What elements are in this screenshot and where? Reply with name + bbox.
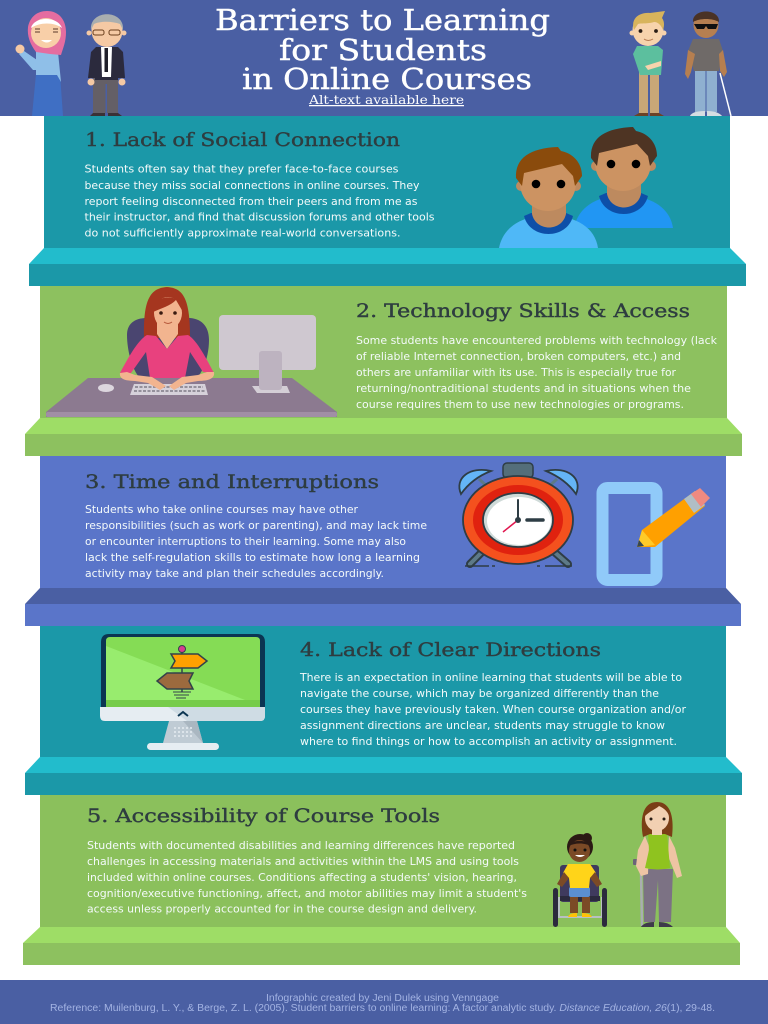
shelf 2	[25, 418, 742, 456]
shelf 5	[23, 927, 740, 965]
student at back	[574, 127, 673, 228]
body text 5: cognition/executive functioning, affect, and motor abilities may limit a student's	[87, 887, 527, 900]
body text 2	[356, 334, 718, 411]
body text 4	[299, 671, 687, 748]
body text 4: navigate the course, which may be organized differently than the	[300, 687, 659, 700]
footer credits: Infographic created by Jeni Dulek using Venngage	[266, 993, 499, 1004]
title: Barriers to Learning	[215, 4, 550, 37]
student at front	[499, 147, 598, 248]
body text 5	[87, 839, 527, 916]
body text 1: their instructor, and find that discussion forums and other tools	[84, 210, 435, 224]
body text 5: challenges in accessing materials and activities within the LMS and using tools	[87, 855, 519, 868]
body text 4: courses they have previously taken. When course organization and/or	[300, 703, 687, 716]
body text 5: included within online courses. Conditions affecting a students' vision, hearing,	[87, 871, 517, 884]
title	[215, 4, 550, 96]
body text 3: activity may take and plan their schedules accordingly.	[85, 567, 384, 580]
icon: rounded notepad outline and pencil	[602, 488, 710, 580]
panel 1: Lack of Social Connection	[29, 116, 746, 286]
heading 5: 5. Accessibility of Course Tools	[87, 805, 440, 827]
body text 1: do not sufficiently approximate real-world conversations.	[84, 226, 400, 240]
body text 2: of reliable Internet connection, broken computers, etc.) and	[356, 350, 681, 363]
icon: student with cane	[685, 12, 731, 116]
body text 1: Students often say that they prefer face-to-face courses	[84, 162, 399, 176]
icon: woman at computer desk	[46, 287, 337, 417]
icon: monitor with signpost	[100, 634, 265, 750]
body text 1: because they miss social connections in online courses. They	[84, 179, 420, 192]
body text 3	[85, 503, 427, 580]
body text 2: returning/nontraditional students and in situations when the	[356, 382, 691, 395]
shelf 3	[25, 588, 741, 626]
heading 1: 1. Lack of Social Connection	[85, 129, 400, 151]
body text 5: access unless properly accounted for in the course design and delivery.	[87, 902, 477, 916]
title: in Online Courses	[242, 63, 532, 96]
panel 3: Time and Interruptions	[25, 456, 741, 626]
body text 4: where to find things or how to accomplish an activity or assignment.	[300, 735, 677, 748]
alt-text link: Alt-text available here	[308, 92, 464, 107]
shelf 1	[29, 248, 746, 286]
footer credits: Reference: Muilenburg, L. Y., & Berge, Z. L. (2005). Student barriers to online learning: A factor analytic study. Distance Education, 26 (1), 29-48.	[50, 1003, 715, 1014]
panel 2: Technology Skills and Access	[25, 286, 742, 456]
heading 4: 4. Lack of Clear Directions	[300, 639, 601, 661]
body text 2: others are unfamiliar with its use. This is especially true for	[356, 366, 677, 379]
icon: alarm clock	[459, 463, 578, 566]
body text 3: Students who take online courses may have other	[85, 503, 359, 516]
body text 4: assignment directions are unclear, students may struggle to know	[300, 719, 665, 732]
body text 1: report feeling disconnected from their peers and from me as	[84, 195, 418, 208]
heading 3: 3. Time and Interruptions	[85, 471, 379, 493]
footer credits	[50, 993, 715, 1014]
icon: older man with glasses	[86, 14, 126, 116]
panel 4: Lack of Clear Directions	[25, 626, 742, 795]
body text 2: course requires them to use new technologies or programs.	[356, 398, 684, 411]
body text 3: or encounter interruptions to their learning. Some may also	[85, 535, 406, 548]
body text 5: Students with documented disabilities and learning differences have reported	[87, 839, 515, 852]
body text 2: Some students have encountered problems with technology (lack	[356, 334, 718, 347]
icon: woman with crutch	[633, 802, 682, 927]
icon: woman in hijab	[16, 11, 66, 116]
icon: two students	[499, 127, 673, 248]
header band	[0, 0, 768, 116]
body text 1	[84, 162, 435, 240]
panel 5: Accessibility of Course Tools	[23, 795, 740, 965]
shelf 4	[25, 757, 742, 795]
footer band	[0, 980, 768, 1024]
icon: blond student	[630, 11, 666, 116]
heading 2: 2. Technology Skills & Access	[356, 300, 690, 322]
icon: girl in wheelchair	[553, 833, 607, 927]
title: for Students	[279, 34, 487, 67]
body text 3: lack the self-regulation skills to estimate how long a learning	[85, 551, 420, 564]
body text 4: There is an expectation in online learning that students will be able to	[299, 671, 682, 684]
body text 3: responsibilities (such as work or parenting), and may lack time	[85, 519, 427, 532]
